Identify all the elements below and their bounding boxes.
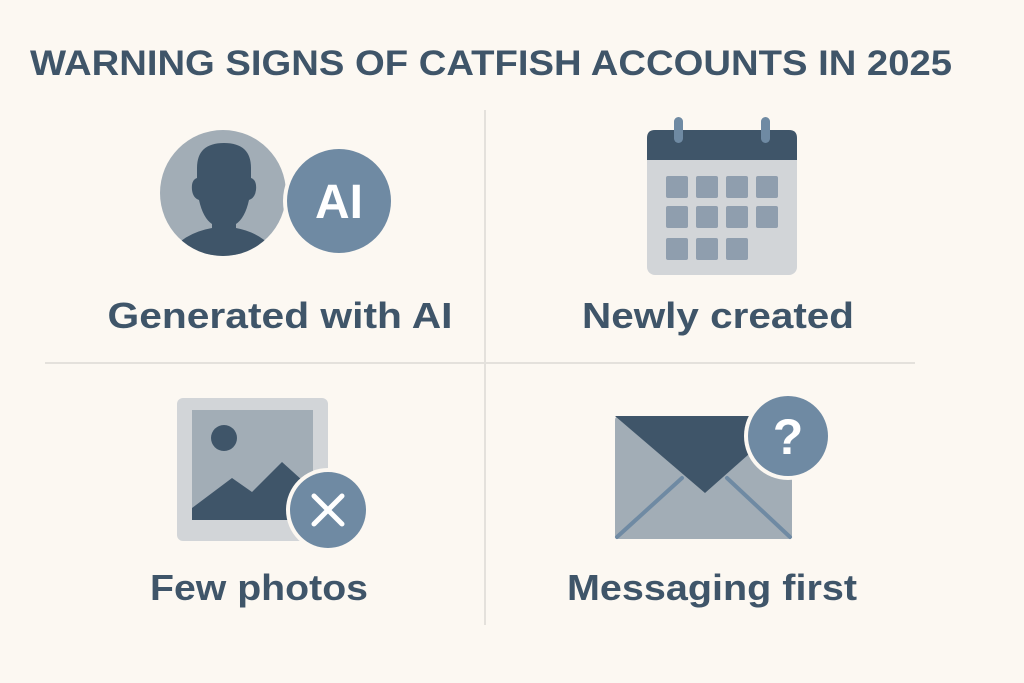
label: messaging first: Messaging first — [567, 567, 857, 608]
icon: photo with X — [177, 398, 370, 552]
icon: avatar with AI badge — [160, 130, 395, 262]
panel: generated with AI — [108, 130, 452, 336]
panel: messaging first — [567, 392, 857, 608]
icon: avatar with AI badge: AI — [315, 176, 363, 229]
panel: few photos — [150, 398, 370, 608]
panel: newly created — [582, 117, 854, 336]
title: WARNING SIGNS OF CATFISH ACCOUNTS IN 2025 — [30, 44, 952, 83]
label: generated with AI: Generated with AI — [108, 295, 452, 336]
icon: calendar — [647, 117, 797, 275]
label: newly created: Newly created — [582, 295, 854, 336]
label: few photos: Few photos — [150, 567, 368, 608]
icon: envelope with question — [615, 392, 832, 539]
icon: envelope with question: ? — [773, 409, 803, 465]
